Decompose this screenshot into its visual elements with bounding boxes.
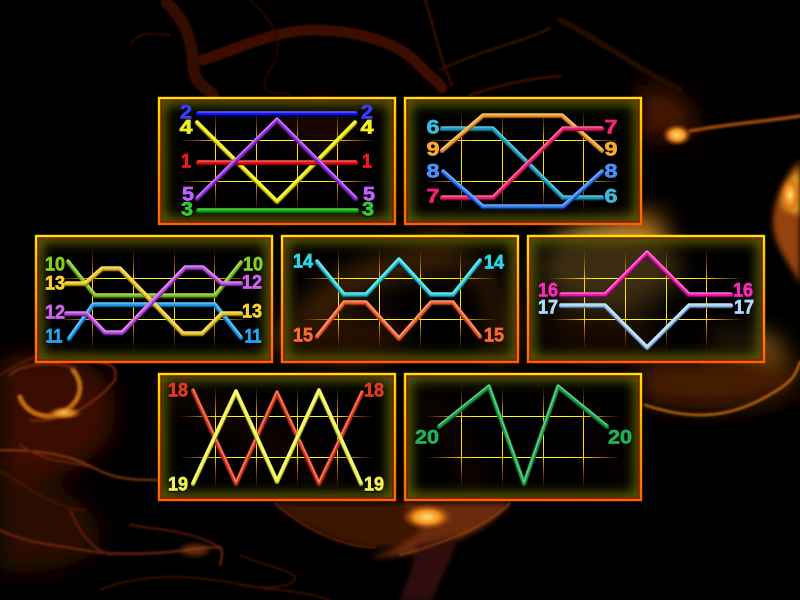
- panel: paylines 18-19: [159, 374, 395, 500]
- line 15 orange: [293, 301, 504, 346]
- line 10 green: 10: [45, 254, 65, 276]
- panel: paylines 6-9: [405, 98, 641, 224]
- line 2 blue: [180, 102, 373, 124]
- line 19 yellow: [168, 389, 384, 496]
- panel: paylines 1-5: [159, 98, 395, 224]
- line 6 teal: 6: [426, 118, 440, 138]
- line 2 blue: 2: [361, 102, 373, 124]
- line 9 orange: [426, 114, 618, 160]
- line 9 orange: 9: [426, 140, 440, 160]
- line 12 purple: 12: [45, 302, 65, 324]
- line 2 blue: 2: [180, 102, 192, 124]
- line 1 red: 1: [181, 152, 191, 172]
- line 3 green: [181, 200, 374, 220]
- line 20 green: 20: [415, 428, 439, 448]
- line 16 magenta: [538, 251, 753, 302]
- line 12 purple: [45, 266, 262, 333]
- line 6 teal: 6: [604, 186, 618, 208]
- line 18 red: [168, 380, 384, 484]
- line 8 blue: [426, 162, 618, 207]
- line 14 cyan: 14: [293, 252, 313, 272]
- line 19 yellow: 19: [364, 474, 384, 496]
- line 20 green: 20: [608, 428, 632, 448]
- line 5 purple: [182, 118, 375, 206]
- line 13 yellow: 13: [45, 274, 65, 294]
- line 3 green: 3: [362, 200, 374, 220]
- line 14 cyan: 14: [484, 252, 504, 274]
- line 7 pink: [426, 118, 618, 208]
- line 18 red: 18: [168, 380, 188, 402]
- line 6 teal: [426, 118, 618, 208]
- line 20 green: [415, 385, 632, 484]
- line 5 purple: 5: [182, 184, 194, 206]
- line 12 purple: 12: [242, 272, 262, 294]
- line 15 orange: 15: [293, 326, 313, 346]
- line 11 blue: 11: [46, 326, 63, 348]
- line 8 blue: 8: [604, 162, 618, 182]
- line 16 magenta: 16: [733, 280, 753, 302]
- bright sparks: [662, 124, 692, 146]
- line 7 pink: 7: [426, 186, 440, 208]
- line 1 red: 1: [362, 152, 372, 172]
- line 19 yellow: 19: [168, 474, 188, 496]
- line 10 green: [45, 254, 263, 296]
- line 16 magenta: 16: [538, 280, 558, 302]
- line 7 pink: 7: [604, 118, 618, 138]
- line 8 blue: 8: [426, 162, 440, 182]
- line 11 blue: [46, 303, 262, 348]
- line 17 light blue: 17: [538, 298, 558, 318]
- line 13 yellow: 13: [242, 302, 262, 322]
- panel: payline 20: [405, 374, 641, 500]
- line 4 yellow: [180, 118, 374, 202]
- panel: paylines 16-17: [528, 236, 764, 362]
- line 4 yellow: 4: [180, 118, 193, 138]
- panel: paylines 10-13: [36, 236, 272, 362]
- line 17 light blue: [538, 298, 754, 348]
- line 9 orange: 9: [604, 140, 618, 160]
- line 11 blue: 11: [244, 326, 262, 348]
- line 18 red: 18: [364, 380, 384, 402]
- line 14 cyan: [293, 252, 504, 295]
- line 15 orange: 15: [484, 326, 504, 346]
- filled smoke sheets: [273, 160, 800, 600]
- line 3 green: 3: [181, 200, 193, 220]
- panel: paylines 14-15: [282, 236, 518, 362]
- line 10 green: 10: [243, 254, 263, 276]
- line 4 yellow: 4: [360, 118, 374, 138]
- line 1 red: [181, 152, 372, 172]
- line 13 yellow: [45, 267, 262, 334]
- line 5 purple: 5: [363, 184, 375, 206]
- line 17 light blue: 17: [734, 298, 754, 318]
